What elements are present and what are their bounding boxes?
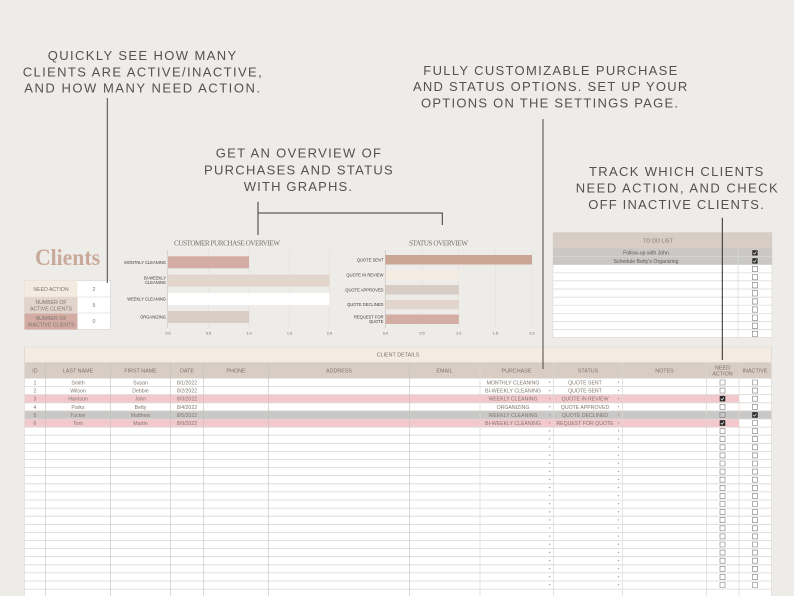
callout: purchase and status options [413, 63, 687, 110]
panel: to do list: TO DO LIST [643, 238, 674, 244]
summary table: 5 [93, 303, 96, 309]
row 1: MONTHLY CLEANING [487, 380, 539, 386]
table title band [24, 347, 772, 362]
callout: active and inactive clients [23, 48, 262, 96]
row 6 [34, 421, 614, 427]
column headers: DATE [180, 368, 194, 374]
bar chart: status overview: 0.5 [419, 332, 425, 336]
row 4: Betty [135, 405, 147, 411]
row 5: WEEKLY CLEANING [488, 413, 538, 419]
bar chart: customer purchase overview [124, 240, 332, 336]
column headers: PHONE [226, 368, 246, 374]
row 2: BI-WEEKLY CLEANING [485, 389, 541, 395]
column headers: ID [32, 368, 38, 374]
row 5: QUOTE DECLINED [562, 413, 608, 419]
bar chart: status overview: QUOTE [369, 319, 384, 324]
column headers: INACTIVE [743, 368, 768, 374]
column headers: STATUS [578, 368, 599, 374]
bar chart: customer purchase overview: 0.5 [206, 332, 211, 336]
bar chart: status overview [345, 240, 535, 336]
row 3: 3 [34, 397, 37, 403]
row 3: John [135, 397, 146, 403]
callout: track need action [576, 164, 778, 212]
bar chart: status overview: QUOTE DECLINED [347, 302, 384, 307]
summary table: 0 [93, 319, 96, 325]
summary table [24, 280, 110, 330]
row 4 [34, 405, 609, 411]
row 4: QUOTE APPROVED [561, 405, 609, 411]
row 2: Wilson [70, 389, 86, 395]
row 2: 8/2/2022 [177, 389, 197, 395]
row 2: Debbie [132, 389, 149, 395]
arrow: bracket to both charts [258, 202, 442, 235]
row 3: Harrison [68, 397, 88, 403]
row 5: 5 [34, 413, 37, 419]
row 1: Susan [133, 380, 148, 386]
bar chart: status overview: 1.5 [493, 332, 498, 336]
bar chart: status overview: 2.0 [529, 332, 535, 336]
row 1: 1 [34, 380, 37, 386]
row 1: QUOTE SENT [568, 380, 603, 386]
row 4: Parks [71, 405, 85, 411]
row 3 [34, 397, 609, 403]
callout: track need action: OFF INACTIVE CLIENTS. [588, 197, 764, 212]
heading: Clients: Clients [35, 245, 100, 270]
bar chart: customer purchase overview: 1.5 [287, 332, 292, 336]
callout: graphs overview: PURCHASES AND STATUS [204, 162, 393, 177]
checkboxes: need action and inactive [720, 380, 758, 587]
column headers: ACTION [712, 372, 733, 378]
callout: active and inactive clients: CLIENTS ARE ACTIVE/INACTIVE, [23, 65, 262, 80]
panel: to do list: Follow-up with John [623, 251, 669, 257]
bar chart: customer purchase overview: BI-WEEKLY [144, 276, 166, 280]
bar chart: customer purchase overview: ORGANIZING [140, 314, 166, 320]
row 5 [34, 413, 608, 419]
row 5: 8/5/2022 [177, 413, 197, 419]
callout: purchase and status options: FULLY CUSTOMIZABLE PURCHASE [423, 63, 678, 78]
row 4: 4 [34, 405, 37, 411]
row 1: 8/1/2022 [177, 380, 197, 386]
callout: active and inactive clients: AND HOW MANY NEED ACTION. [24, 81, 260, 96]
row 5: Matthew [131, 413, 151, 419]
row 5: Tucker [70, 413, 86, 419]
bar chart: status overview: REQUEST FOR [354, 314, 384, 320]
bar chart: customer purchase overview: CUSTOMER PURCHASE OVERVIEW [174, 240, 280, 248]
summary table: ACTIVE CLIENTS [30, 306, 73, 312]
callout: track need action: NEED ACTION, AND CHECK [576, 181, 778, 196]
bar chart: customer purchase overview: CLEANING [145, 280, 166, 285]
row 3: 8/3/2022 [177, 397, 197, 403]
bar chart: status overview: 0.0 [383, 332, 388, 336]
summary table: NUMBER OF [35, 300, 67, 306]
column headers: NEED [715, 366, 730, 372]
callout: graphs overview: GET AN OVERVIEW OF [216, 146, 381, 161]
panel: to do list: Schedule Betty's Organizing [613, 259, 679, 265]
row 6: Tom [73, 421, 83, 427]
row 3: WEEKLY CLEANING [488, 397, 538, 403]
bar chart: status overview: QUOTE APPROVED [345, 288, 384, 292]
table title band: CLIENT DETAILS [377, 352, 420, 358]
callout: purchase and status options: AND STATUS OPTIONS. SET UP YOUR [413, 79, 687, 94]
bar chart: status overview: STATUS OVERVIEW [409, 240, 468, 248]
bar chart: customer purchase overview: 2.0 [327, 332, 332, 336]
summary table: INACTIVE CLIENTS [27, 322, 75, 328]
arrow: clients summary pointer [106, 98, 108, 283]
row 4: ORGANIZING [497, 405, 529, 411]
row 6: 6 [34, 421, 37, 427]
bar chart: status overview: QUOTE IN REVIEW [346, 272, 384, 278]
column headers [24, 362, 772, 378]
row 2 [34, 389, 603, 395]
panel: client details table [24, 347, 772, 596]
callout: active and inactive clients: QUICKLY SEE HOW MANY [48, 48, 237, 63]
summary table: NEED ACTION [33, 287, 69, 293]
bar chart: customer purchase overview: 0.0 [165, 332, 171, 336]
bar chart: status overview: 1.0 [456, 332, 461, 336]
summary table: NUMBER OF [35, 316, 67, 322]
arrow: need action column pointer [721, 218, 723, 360]
panel: to do list [553, 232, 772, 338]
highlighted rows [24, 395, 772, 427]
callout: track need action: TRACK WHICH CLIENTS [589, 164, 764, 179]
column headers: LAST NAME [63, 368, 94, 374]
row 6: BI-WEEKLY CLEANING [485, 421, 541, 427]
column headers: FIRST NAME [124, 368, 157, 374]
callout: graphs overview: WITH GRAPHS. [244, 179, 352, 194]
row 6: REQUEST FOR QUOTE [556, 421, 614, 427]
column headers: NOTES [655, 368, 674, 374]
bar chart: status overview: QUOTE SENT [357, 258, 384, 262]
column headers: ADDRESS [326, 368, 352, 374]
row 2: QUOTE SENT [568, 389, 603, 395]
arrow: purchase column pointer [542, 119, 544, 369]
column headers: EMAIL [436, 368, 453, 374]
bar chart: customer purchase overview: 1.0 [246, 332, 252, 336]
bar chart: customer purchase overview: MONTHLY CLEANING [124, 260, 166, 265]
row 3: QUOTE IN REVIEW [562, 397, 609, 403]
row 6: Martin [133, 421, 148, 427]
row 4: 8/4/2022 [177, 405, 197, 411]
callout: purchase and status options: OPTIONS ON THE SETTINGS PAGE. [421, 95, 678, 110]
row 1 [34, 380, 603, 386]
column headers: PURCHASE [502, 368, 532, 374]
summary table: 2 [93, 287, 96, 293]
dropdown arrows [549, 382, 620, 586]
row 6: 8/9/2022 [177, 421, 197, 427]
row 2: 2 [34, 389, 37, 395]
bar chart: customer purchase overview: WEEKLY CLEANING [127, 296, 166, 302]
callout: graphs overview [204, 146, 393, 194]
row 1: Smith [71, 380, 85, 386]
